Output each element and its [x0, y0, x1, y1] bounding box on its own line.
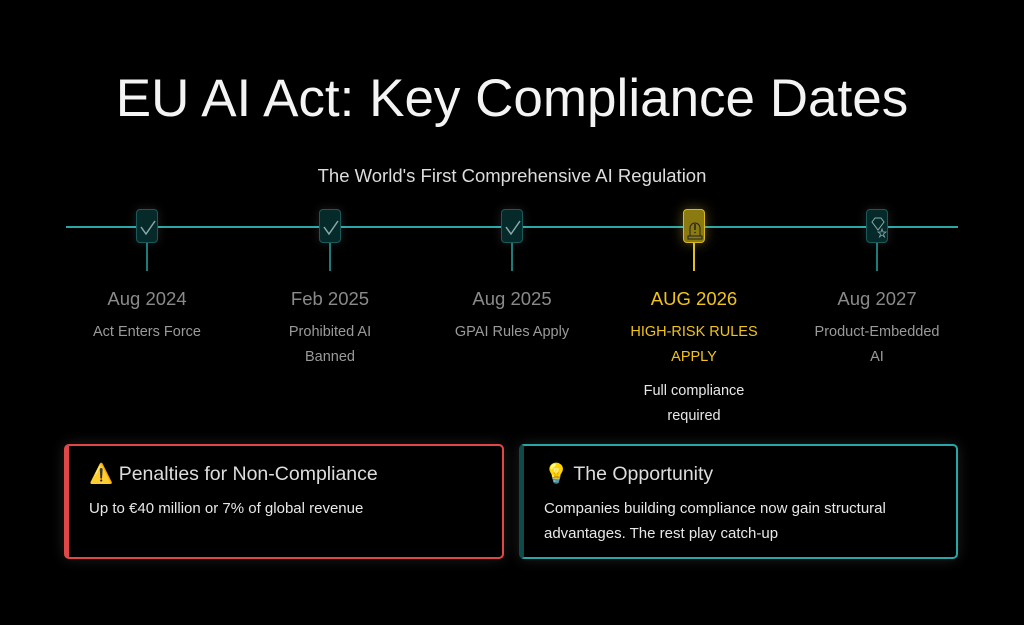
text: Aug 2025 — [472, 288, 552, 309]
text: AI — [870, 349, 884, 365]
card: opportunity: 💡 The Opportunity — [544, 463, 713, 485]
labels: Act Enters Force — [93, 324, 201, 340]
marker 2 — [319, 209, 341, 243]
card: opportunity: Companies building compliance now gain structural — [544, 500, 886, 517]
marker 4 alert — [683, 209, 705, 243]
text: GPAI Rules Apply — [455, 324, 569, 340]
marker 3 — [501, 209, 523, 243]
text: Full compliance — [644, 383, 744, 399]
card: opportunity: advantages. The rest play catch-up — [544, 525, 778, 542]
dates: Aug 2024 — [107, 288, 187, 309]
card: penalties: ⚠️ Penalties for Non-Compliance — [89, 463, 378, 485]
text: Banned — [305, 349, 355, 365]
card: opportunity — [519, 444, 958, 559]
text: required — [667, 408, 721, 424]
subtitle: The World's First Comprehensive AI Regulation — [318, 165, 706, 186]
marker 5 — [866, 209, 888, 243]
text: Feb 2025 — [291, 288, 369, 309]
card: penalties — [64, 444, 504, 559]
text: Product-Embedded — [815, 324, 939, 340]
text: AUG 2026 — [651, 288, 737, 309]
card: penalties: Up to €40 million or 7% of global revenue — [89, 500, 363, 517]
text: APPLY — [671, 349, 717, 365]
text: Prohibited AI — [289, 324, 371, 340]
timeline line — [66, 226, 958, 228]
marker 1 — [136, 209, 158, 243]
text: HIGH-RISK RULES — [630, 324, 758, 340]
text: Aug 2027 — [837, 288, 917, 309]
title: EU AI Act: Key Compliance Dates — [116, 69, 908, 128]
